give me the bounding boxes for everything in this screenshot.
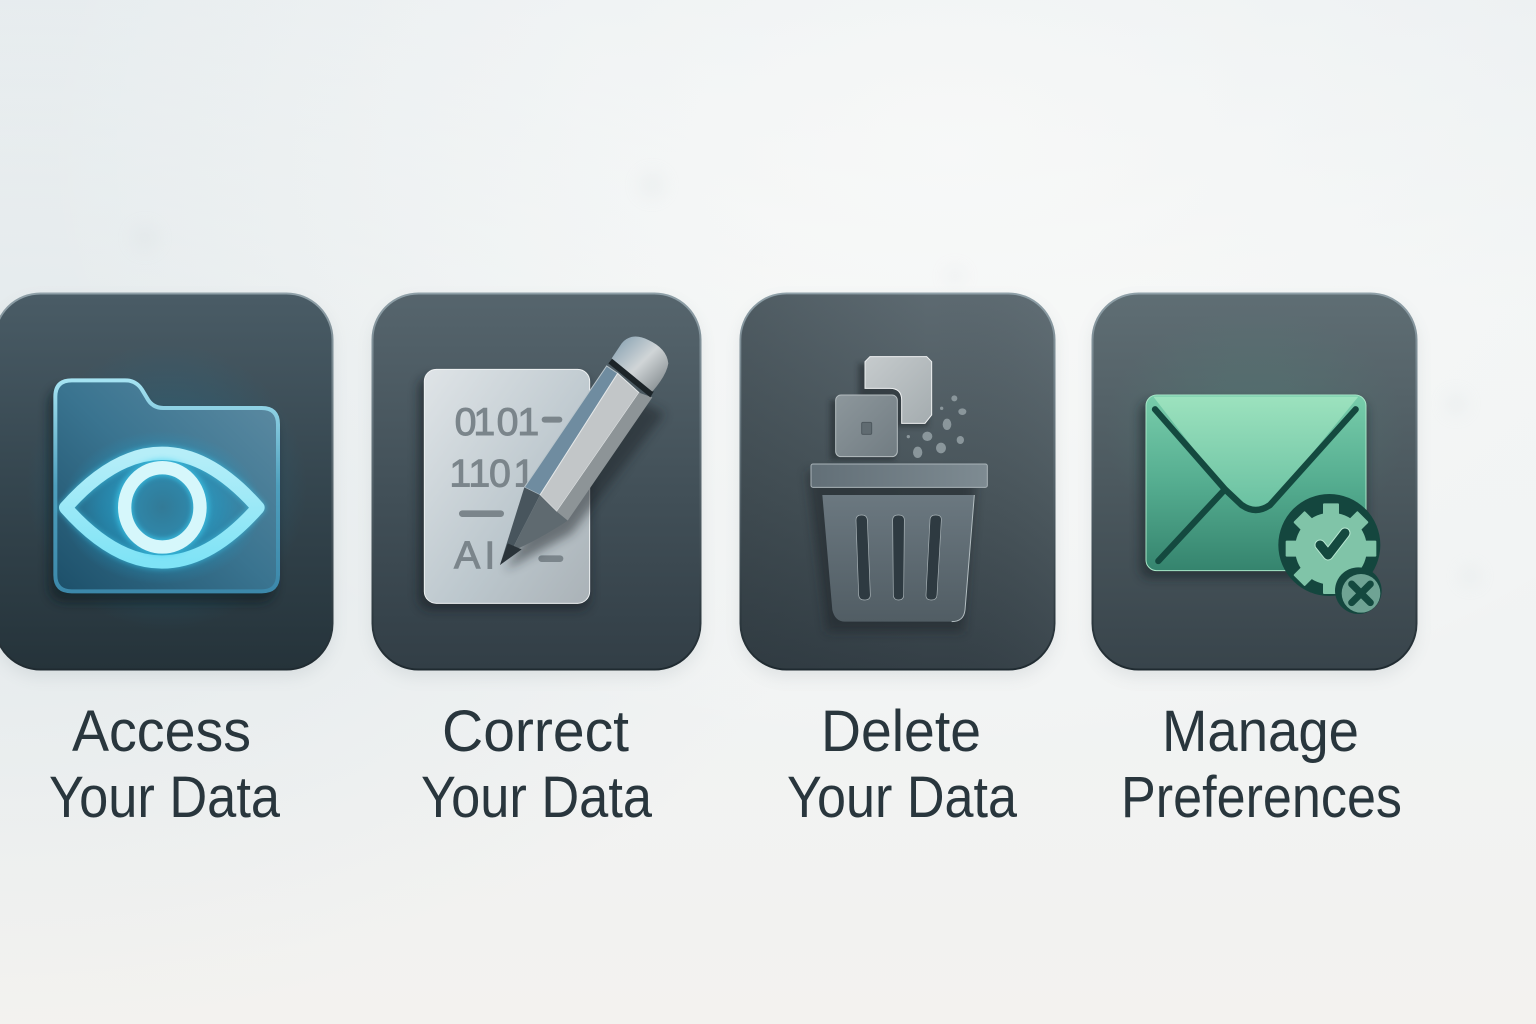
label: delete your data: Delete — [821, 699, 981, 764]
card background — [740, 294, 1054, 670]
label: access your data: Access — [72, 699, 251, 764]
data block: lower — [836, 395, 897, 457]
panel: delete your data — [740, 294, 1055, 677]
icon: folder with glowing eye — [27, 343, 307, 630]
panel: access your data — [0, 294, 333, 677]
label: access your data — [49, 699, 281, 830]
bin lid — [811, 464, 987, 487]
card background — [0, 294, 332, 670]
data particles — [907, 395, 966, 458]
icon: envelope with gear — [1140, 395, 1382, 614]
panel: correct your data — [372, 294, 701, 677]
label: delete your data — [787, 699, 1018, 830]
label: manage preferences: Preferences — [1121, 765, 1402, 830]
label: correct your data — [421, 699, 653, 830]
label: delete your data: Your Data — [787, 765, 1018, 830]
pencil — [500, 337, 668, 565]
cancel badge — [1335, 567, 1382, 614]
label: manage preferences: Manage — [1162, 699, 1359, 764]
label: correct your data: Your Data — [421, 765, 653, 830]
document — [424, 369, 590, 603]
binary text on document — [449, 400, 563, 577]
label: manage preferences — [1121, 699, 1402, 830]
gear with checkmark — [1286, 503, 1376, 594]
label: correct your data: Correct — [442, 699, 629, 764]
icon: document and pencil — [418, 337, 668, 610]
panel: manage preferences — [1092, 294, 1417, 677]
envelope — [1146, 395, 1366, 571]
card background — [1092, 294, 1416, 670]
label: access your data: Your Data — [49, 765, 281, 830]
binary text on document: 1101 — [449, 452, 535, 496]
binary text on document: 0101 — [455, 400, 539, 444]
binary text on document: AI — [454, 533, 495, 577]
card background — [372, 294, 700, 670]
icon: trash bin with data blocks — [807, 357, 987, 632]
data block: upper — [865, 357, 932, 423]
bin body — [822, 495, 974, 622]
